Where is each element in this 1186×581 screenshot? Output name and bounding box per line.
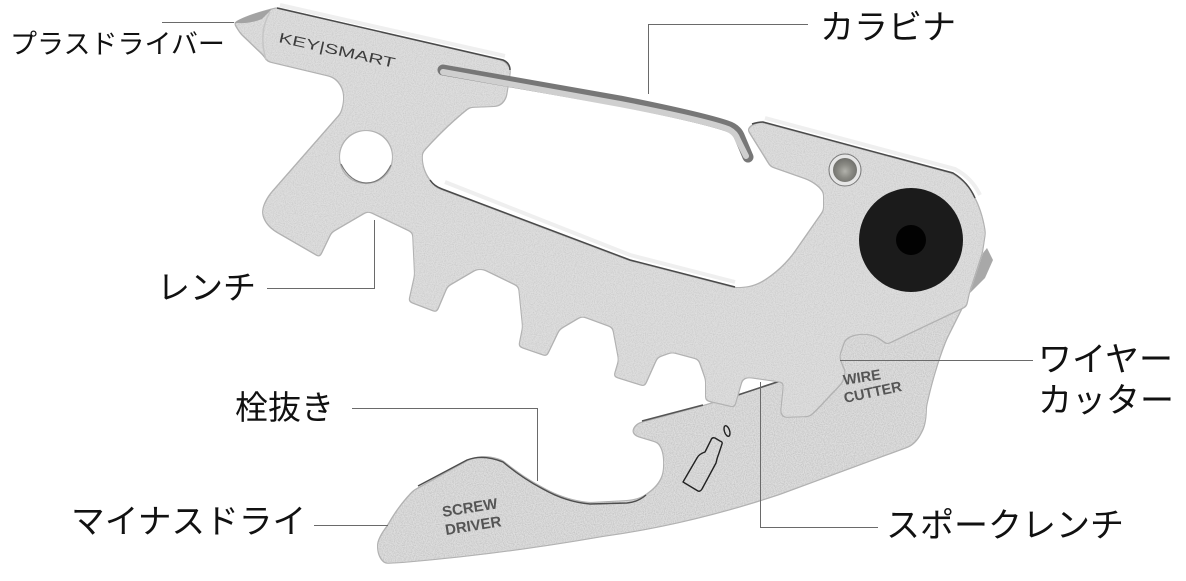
label: WIRE CUTTER engraving bbox=[842, 367, 904, 407]
label: SCREW DRIVER engraving bbox=[441, 495, 503, 539]
icon: black rubber stud bbox=[859, 188, 963, 292]
icon: bottle engraving bbox=[683, 425, 731, 491]
icon: phillips screwdriver tip bbox=[234, 9, 272, 60]
logo: KEY|SMART: KEY|SMART bbox=[277, 29, 398, 71]
soft highlight along top edges bbox=[280, 5, 980, 282]
label: SCREW DRIVER engraving: SCREW bbox=[441, 495, 500, 521]
callout: ワイヤーカッター: ワイヤー bbox=[1038, 341, 1173, 379]
label: WIRE CUTTER engraving: CUTTER bbox=[843, 379, 904, 407]
callout: カラビナ bbox=[648, 9, 956, 94]
carabiner wire gate bbox=[443, 70, 748, 157]
callout: スポークレンチ bbox=[760, 382, 1124, 545]
callout: レンチ: レンチ bbox=[157, 269, 256, 306]
callout: 栓抜き bbox=[235, 389, 538, 481]
label: SCREW DRIVER engraving: DRIVER bbox=[444, 513, 503, 539]
tool: lower handle with screwdriver and bottle opener bbox=[377, 300, 967, 564]
lower handle dark top edge bbox=[418, 457, 646, 504]
callout: プラスドライバー: プラスドライバー bbox=[10, 30, 225, 60]
callout: レンチ bbox=[157, 220, 374, 306]
icon: rear blade bbox=[970, 248, 993, 293]
tool: upper body with wrench teeth bbox=[233, 7, 993, 539]
callout: カラビナ: カラビナ bbox=[820, 9, 956, 47]
icon: carabiner rivet bbox=[829, 154, 861, 186]
callout: マイナスドライ: マイナスドライ bbox=[71, 503, 306, 541]
icon: hole shading bbox=[341, 164, 391, 183]
callout: ワイヤーカッター: カッター bbox=[1038, 382, 1174, 420]
upper body dark edges bbox=[277, 8, 510, 70]
callout: 栓抜き: 栓抜き bbox=[235, 389, 334, 426]
callout: スポークレンチ: スポークレンチ bbox=[886, 507, 1124, 545]
callout: ワイヤーカッター bbox=[840, 341, 1174, 420]
label: WIRE CUTTER engraving: WIRE bbox=[842, 367, 882, 389]
